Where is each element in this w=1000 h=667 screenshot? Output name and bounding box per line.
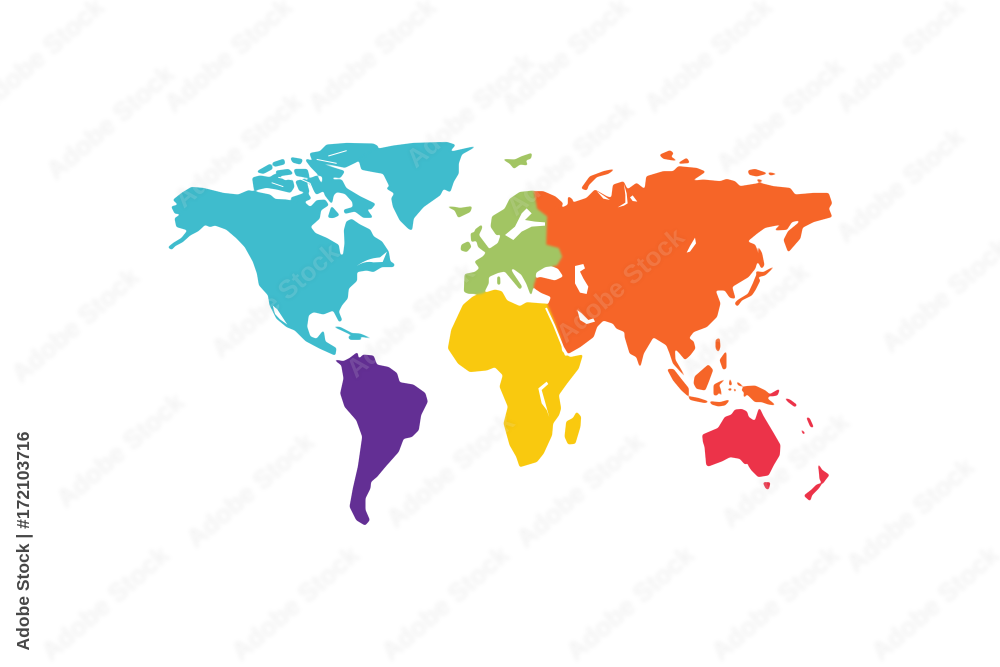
Asian islands: Japan and Sakhalin	[735, 247, 774, 306]
Persian Gulf	[577, 310, 595, 324]
Svalbard	[503, 153, 532, 168]
watermark shadow layer: Adobe Stock	[5, 261, 145, 388]
watermark shadow layer: Adobe Stock	[675, 256, 815, 383]
watermark light layer: Adobe Stock	[180, 426, 320, 553]
watermark shadow layer: Adobe Stock	[510, 426, 650, 553]
watermark shadow layer: Adobe Stock	[400, 46, 540, 173]
watermark light layer: Adobe Stock	[225, 539, 365, 666]
Arctic channels	[272, 151, 347, 195]
Arctic islands	[253, 158, 343, 202]
watermark light layer: Adobe Stock	[40, 58, 180, 185]
Caspian Sea	[575, 264, 588, 294]
watermark shadow layer: Adobe Stock	[225, 539, 365, 666]
watermark light layer: Adobe Stock	[380, 406, 520, 533]
watermark light layer: Adobe Stock	[35, 539, 175, 666]
Southampton Island	[328, 207, 339, 218]
watermark light layer: Adobe Stock	[710, 51, 850, 178]
continents	[168, 142, 832, 525]
Sumatra	[668, 369, 688, 396]
Great Lakes of Africa	[538, 382, 549, 417]
continent: Asia	[532, 151, 832, 377]
Hokkaido	[756, 267, 774, 277]
vertical stock id: Adobe Stock | #172103716	[13, 432, 33, 650]
Lake Baikal	[687, 238, 696, 253]
Asian waters	[575, 184, 696, 324]
New Siberian Islands	[748, 169, 777, 181]
continent: Oceania	[703, 389, 829, 501]
watermark light layer: Adobe Stock	[715, 406, 855, 533]
Gulf of California	[273, 305, 287, 325]
watermark light layer: Adobe Stock	[5, 261, 145, 388]
continents: Africa and South America	[335, 290, 582, 525]
Mediterranean islands	[498, 277, 500, 284]
Baltic Sea	[505, 208, 545, 240]
watermark shadow layer: Adobe Stock	[560, 539, 700, 666]
watermark shadow layer: Adobe Stock	[500, 94, 640, 221]
African waters	[538, 308, 581, 417]
continent: South America	[335, 353, 427, 525]
North American waters	[272, 151, 387, 325]
Baffin Island	[323, 180, 375, 217]
watermark shadow layer: Adobe Stock	[840, 451, 980, 578]
watermark light layer: Adobe Stock	[500, 94, 640, 221]
watermark light layer: Adobe Stock	[205, 236, 345, 363]
Honshu	[735, 275, 760, 306]
watermark light layer: Adobe Stock	[560, 539, 700, 666]
Iceland	[448, 207, 472, 217]
Tasmania	[763, 483, 770, 489]
watermark shadow layer: Adobe Stock	[340, 256, 480, 383]
Arctic river gulfs	[597, 184, 637, 207]
watermark light layer: Adobe Stock	[840, 451, 980, 578]
Pacific islands	[769, 389, 813, 434]
watermark shadow layer: Adobe Stock	[715, 406, 855, 533]
New Guinea	[742, 386, 775, 405]
continent: Africa	[448, 290, 582, 467]
watermark light layer: Adobe Stock	[550, 221, 690, 348]
inland seas, lakes and straits	[272, 151, 696, 417]
Philippines	[716, 338, 726, 369]
Java and Lesser Sunda	[689, 397, 729, 406]
Madagascar	[565, 412, 581, 444]
watermark shadow layer: Adobe Stock	[180, 426, 320, 553]
Borneo	[694, 365, 713, 390]
Great Britain	[471, 225, 488, 252]
Europe mainland	[464, 191, 562, 295]
Eurasia mainland	[532, 167, 832, 377]
Caribbean islands	[334, 327, 372, 339]
Greenland	[359, 142, 475, 230]
watermark light layer: Adobe Stock	[340, 256, 480, 383]
Severnaya Zemlya	[660, 151, 689, 163]
watermark shadow layer: Adobe Stock	[205, 236, 345, 363]
watermark shadow layer: Adobe Stock	[168, 86, 308, 213]
Ireland	[461, 242, 471, 252]
New Zealand	[804, 464, 829, 501]
watermark shadow layer: Adobe Stock	[705, 539, 845, 666]
watermark shadow layer: Adobe Stock	[380, 406, 520, 533]
Ellesmere Island	[310, 143, 378, 167]
watermark light layer: Adobe Stock	[675, 256, 815, 383]
watermark shadow layer: Adobe Stock	[50, 386, 190, 513]
watermark light layer: Adobe Stock	[50, 386, 190, 513]
watermark shadow layer: Adobe Stock	[35, 539, 175, 666]
Novaya Zemlya	[582, 169, 614, 190]
continent: Europe	[461, 191, 562, 295]
watermark shadow layer: Adobe Stock	[550, 221, 690, 348]
watermark shadow layer: Adobe Stock	[40, 58, 180, 185]
Sakhalin	[758, 247, 764, 268]
watermark shadow layer: Adobe Stock	[830, 121, 970, 248]
Australia	[703, 408, 780, 477]
watermark shadow layer: Adobe Stock	[375, 539, 515, 666]
Maluku islands	[727, 378, 746, 397]
watermark light layer: Adobe Stock	[830, 121, 970, 248]
Gulf of St Lawrence	[357, 252, 387, 266]
watermark light layer: Adobe Stock	[400, 46, 540, 173]
watermark shadow layer: Adobe Stock	[710, 51, 850, 178]
North America mainland	[168, 187, 394, 355]
Southeast Asia and Oceania	[668, 338, 829, 501]
Sulawesi	[714, 379, 725, 396]
watermark light layer: Adobe Stock	[168, 86, 308, 213]
watermark light layer: Adobe Stock	[705, 539, 845, 666]
continent: North America and Greenland	[168, 142, 475, 355]
watermark light layer: Adobe Stock	[375, 539, 515, 666]
watermark light layer: Adobe Stock	[510, 426, 650, 553]
Red Sea and Gulf of Aden	[546, 308, 581, 355]
